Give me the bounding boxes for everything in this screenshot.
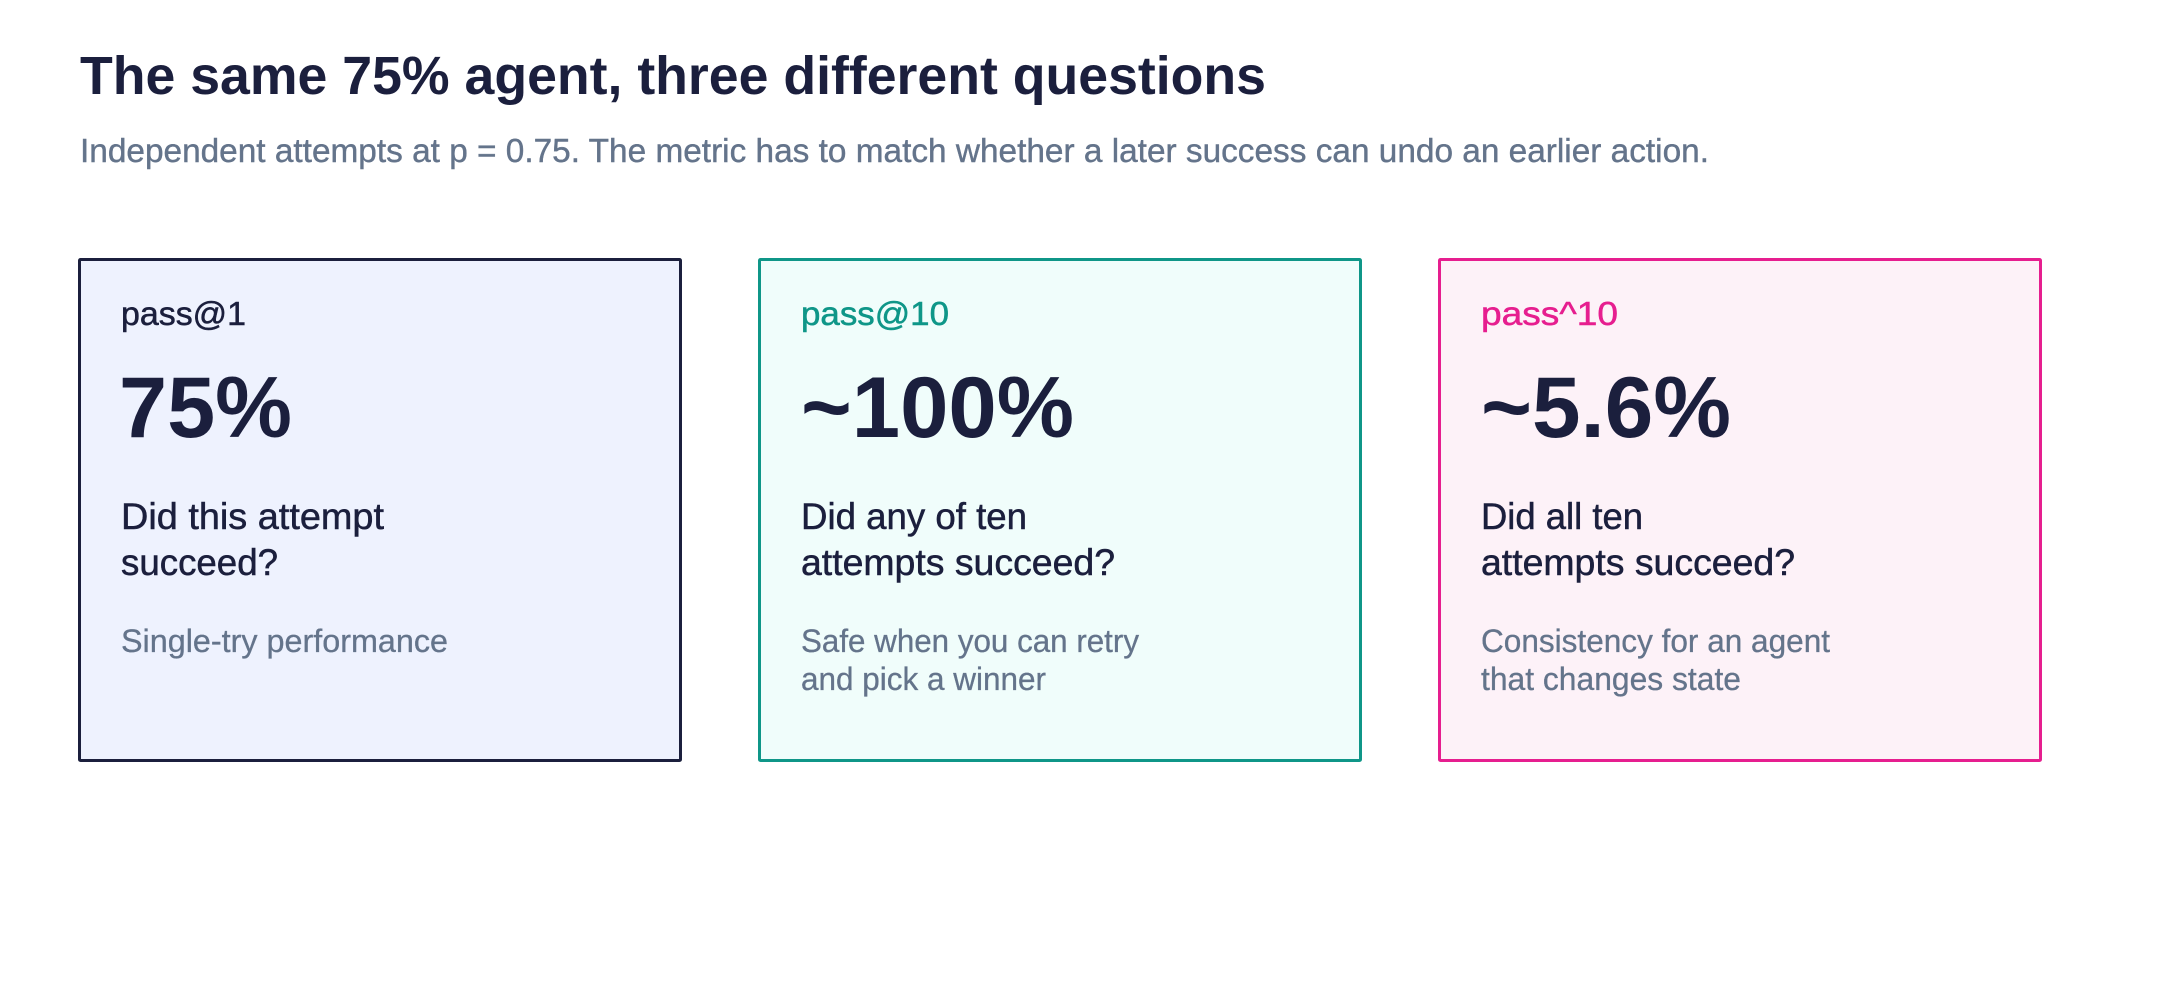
metric label: pass@10: pass@10	[801, 295, 949, 332]
subtitle: Independent attempts at p = 0.75. The metric has to match whether a later success can undo an earlier action.	[80, 132, 1709, 169]
description: Single-try performance	[121, 623, 448, 659]
description: that changes state	[1481, 661, 1741, 697]
value: 75%: 75%	[119, 360, 292, 456]
value: ~100%: ~100%	[801, 360, 1074, 456]
question: attempts succeed?	[801, 542, 1115, 583]
question	[1481, 496, 1795, 583]
value: ~5.6%: ~5.6%	[1481, 360, 1731, 456]
description	[801, 623, 1139, 697]
question: Did all ten	[1481, 496, 1643, 537]
question: attempts succeed?	[1481, 542, 1795, 583]
panel: pass@10	[758, 258, 1362, 762]
description	[1481, 623, 1830, 697]
description: Safe when you can retry	[801, 623, 1139, 659]
panel: pass^10	[1438, 258, 2042, 762]
question: Did this attempt	[121, 496, 385, 537]
question: succeed?	[121, 542, 278, 583]
question	[801, 496, 1115, 583]
description: and pick a winner	[801, 661, 1046, 697]
panel: pass@1	[78, 258, 682, 762]
question	[121, 496, 385, 583]
metric label: pass@1: pass@1	[121, 295, 246, 332]
title: The same 75% agent, three different questions	[80, 46, 1266, 106]
metric label: pass^10: pass^10	[1481, 295, 1618, 332]
question: Did any of ten	[801, 496, 1027, 537]
description: Consistency for an agent	[1481, 623, 1830, 659]
